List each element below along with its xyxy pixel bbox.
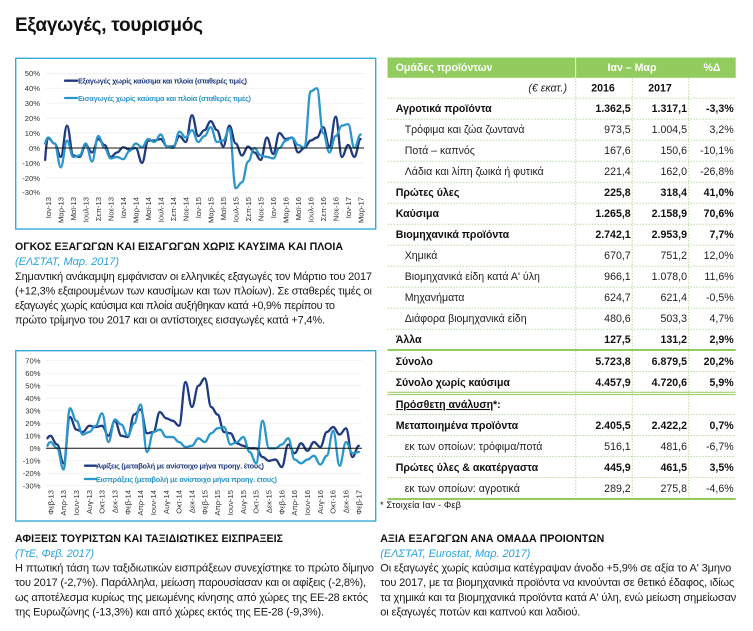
- table row: 4,7%: [710, 313, 734, 325]
- table row: -26,8%: [700, 166, 734, 178]
- panel: arrivals and receipts chart: [16, 351, 376, 521]
- table row: 6.879,5: [652, 356, 687, 368]
- table row: Ποτά – καπνός: [405, 145, 475, 157]
- y axis labels: -30%: [22, 188, 40, 197]
- y axis labels: 50%: [25, 382, 41, 390]
- table row: 670,7: [604, 250, 631, 262]
- table row: 2.742,1: [595, 229, 631, 241]
- legend: Εισαγωγές χωρίς καύσιμα και πλοία (σταθερές τιμές): [78, 94, 252, 103]
- table row: εκ των οποίων: τρόφιμα/ποτά: [405, 441, 542, 453]
- x axis labels: Αυγ-15: [239, 490, 248, 514]
- table row: 503,3: [660, 313, 687, 325]
- legend: Αφίξεις (μεταβολή με ανίστοιχο μήνα προηγ. έτους): [96, 462, 265, 470]
- table row: Διάφορα βιομηχανικά είδη: [405, 313, 527, 325]
- y axis labels: 10%: [25, 129, 40, 138]
- y axis labels: 30%: [25, 99, 40, 108]
- x axis labels: Απρ-14: [136, 490, 145, 516]
- table row: Πρώτες ύλες: [396, 187, 460, 199]
- y axis labels: -10%: [22, 159, 40, 168]
- text block: tourist arrivals and receipts: (ΤτΕ, Φεβ. 2017): [15, 548, 94, 560]
- table row: 1.317,1: [652, 103, 687, 115]
- x axis labels: Φεβ-17: [354, 490, 363, 515]
- x axis labels: Οκτ-13: [98, 490, 107, 514]
- series lines: [47, 378, 359, 470]
- table row: 0,7%: [710, 420, 734, 432]
- x axis labels: Σεπ-13: [94, 197, 103, 221]
- table row: [405, 483, 734, 495]
- table row: 5.723,8: [595, 356, 631, 368]
- table row: 2.953,9: [652, 229, 687, 241]
- table row: [396, 377, 734, 389]
- table row: 5,9%: [710, 377, 734, 389]
- table row: 624,7: [604, 292, 631, 304]
- x axis labels: [44, 197, 366, 223]
- x axis labels: Ιαν-17: [344, 197, 353, 218]
- text block: export value by product group: τα χημικά και τα βιομηχανικά προϊόντα κατά Α' ύλη, ενώ μείωση σημείωσαν: [380, 592, 737, 604]
- series lines: [45, 88, 361, 188]
- table row: -10,1%: [700, 145, 734, 157]
- text block: export value by product group: (ΕΛΣΤΑΤ, Eurostat, Μαρ. 2017): [380, 548, 531, 560]
- x axis labels: Ιουν-16: [303, 490, 312, 515]
- text block: tourist arrivals and receipts: της Ευρωζώνης (-13,3%) και από χώρες εκτός της ΕΕ-28 (-9,3%).: [15, 607, 324, 619]
- table row: εκ των οποίων: αγροτικά: [405, 483, 520, 495]
- table row: 1.004,5: [652, 124, 687, 136]
- table row: 289,2: [604, 483, 631, 495]
- x axis labels: Αυγ-13: [85, 490, 94, 514]
- text block: export value by product group: Οι εξαγωγές χωρίς καύσιμα κατέγραψαν άνοδο +5,9% σε αξία το Α' 3μηνο: [380, 563, 731, 575]
- table row: -3,3%: [706, 103, 734, 115]
- table row: [405, 250, 734, 262]
- x axis labels: Δεκ-15: [264, 490, 274, 513]
- text block: export value by product group: οι εξαγωγές ποτών και καπνού και λαδιού.: [380, 607, 580, 619]
- x axis labels: Ιουν-13: [72, 490, 81, 515]
- table row: 41,0%: [704, 187, 734, 199]
- x axis labels: Μαϊ-16: [294, 197, 303, 220]
- table row: 162,0: [660, 166, 687, 178]
- table row: [405, 124, 734, 136]
- x axis labels: Ιουν-14: [149, 490, 158, 515]
- x axis labels: Μαϊ-13: [69, 197, 78, 220]
- table header: (€ εκατ.): [528, 83, 567, 95]
- x axis labels: Σεπ-15: [244, 197, 253, 221]
- table row: 1.362,5: [595, 103, 631, 115]
- legend: [85, 462, 278, 484]
- text block: tourist arrivals and receipts: ως αποτέλεσμα κυρίως της μειωμένης κίνησης από χώρες της ΕΕ-28 εκτός: [15, 592, 368, 604]
- x axis labels: Οκτ-16: [329, 490, 338, 514]
- table row: 2.422,2: [652, 420, 687, 432]
- text block: tourist arrivals and receipts: ΑΦΙΞΕΙΣ ΤΟΥΡΙΣΤΩΝ ΚΑΙ ΤΑΞΙΔΙΩΤΙΚΕΣ ΕΙΣΠΡΑΞΕΙΣ: [15, 533, 284, 545]
- table row: Καύσιμα: [396, 208, 439, 220]
- x axis labels: Μαϊ-15: [219, 197, 228, 220]
- x axis labels: Μαρ-13: [56, 197, 66, 223]
- table row: Τρόφιμα και ζώα ζωντανά: [405, 124, 524, 136]
- table row: 973,5: [604, 124, 631, 136]
- x axis labels: Ιαν-16: [269, 197, 278, 218]
- table row: 516,1: [604, 441, 631, 453]
- table row: 12,0%: [704, 250, 734, 262]
- table row: Πρώτες ύλες & ακατέργαστα: [396, 462, 539, 474]
- table row: 480,6: [604, 313, 631, 325]
- table row: [396, 229, 734, 241]
- text block: export value by product group: [380, 533, 737, 619]
- footnote: * Στοιχεία Ιαν - Φεβ: [380, 500, 461, 510]
- table header: Ιαν – Μαρ: [607, 62, 657, 74]
- x axis labels: Δεκ-16: [342, 490, 350, 513]
- table header: Ομάδες προϊόντων: [396, 62, 493, 74]
- table row: [405, 145, 734, 157]
- table row: 2,9%: [710, 334, 734, 346]
- table row: [396, 462, 734, 474]
- legend: Εισπράξεις (μεταβολή με ανίστοιχο μήνα προηγ. έτους): [96, 475, 278, 484]
- x axis labels: Ιουλ-14: [156, 197, 166, 222]
- table row: 318,4: [660, 187, 687, 199]
- y axis labels: 60%: [25, 369, 41, 378]
- table row: [405, 166, 734, 178]
- x axis labels: Δεκ-14: [188, 490, 196, 513]
- text block: exports and imports volume: (ΕΛΣΤΑΤ, Μαρ. 2017): [15, 256, 119, 268]
- x axis labels: Δεκ-13: [110, 490, 120, 513]
- text block: exports and imports volume: πρώτο τρίμηνο του 2017 και οι αντίστοιχες εισαγωγές κατά +7,4%.: [15, 315, 325, 327]
- table row: 621,4: [660, 292, 687, 304]
- table row: 751,2: [660, 250, 687, 262]
- y axis labels: [23, 356, 41, 490]
- legend: Εξαγωγές χωρίς καύσιμα και πλοία (σταθερές τιμές): [78, 76, 248, 86]
- text block: export value by product group: του 2017, με τα βιομηχανικά προϊόντα να κινούνται σε θετικό έδαφος, ιδίως: [380, 577, 734, 589]
- table row: Βιομηχανικά προϊόντα: [396, 229, 510, 241]
- x axis labels: Σεπ-14: [169, 197, 178, 221]
- table row: Άλλα: [396, 334, 422, 346]
- text block: tourist arrivals and receipts: του 2017 (-2,7%). Παράλληλα, μείωση παρουσίασαν και οι αφίξεις (-2,8%),: [15, 577, 366, 589]
- text block: exports and imports volume: Σημαντική ανάκαμψη εμφάνισαν οι ελληνικές εξαγωγές τον Μάρτιο του 2017: [15, 271, 372, 283]
- table row: -4,6%: [706, 483, 734, 495]
- y axis labels: 0%: [30, 444, 41, 453]
- table header: 2016: [591, 83, 615, 95]
- x axis labels: Οκτ-15: [252, 490, 261, 514]
- table row: [396, 208, 734, 220]
- y axis labels: [22, 69, 40, 197]
- table row: 131,2: [660, 334, 687, 346]
- table row: Αγροτικά προϊόντα: [396, 103, 492, 115]
- table row: 461,5: [660, 462, 687, 474]
- table row: 11,6%: [704, 271, 734, 283]
- table row: 1.078,0: [652, 271, 687, 283]
- panel: product groups table: [388, 58, 736, 499]
- x axis labels: Φεβ-15: [200, 490, 209, 515]
- x axis labels: Ιαν-15: [194, 197, 203, 218]
- y axis labels: 30%: [25, 406, 41, 416]
- text block: export value by product group: ΑΞΙΑ ΕΞΑΓΩΓΩΝ ΑΝΑ ΟΜΑΔΑ ΠΡΟΙΟΝΤΩΝ: [380, 533, 604, 545]
- x axis labels: Νοε-16: [332, 197, 340, 221]
- table row: -6,7%: [706, 441, 734, 453]
- table row: Μηχανήματα: [405, 292, 464, 304]
- text block: exports and imports volume: εξαγωγές χωρίς καύσιμα και πλοία αυξήθηκαν κατά +0,9% περίπου το: [15, 300, 335, 312]
- x axis labels: Αυγ-14: [162, 490, 171, 514]
- x axis labels: Νοε-13: [106, 197, 116, 221]
- table row: [405, 271, 734, 283]
- y axis labels: 20%: [25, 419, 41, 428]
- x axis labels: Απρ-13: [59, 490, 68, 516]
- text block: exports and imports volume: (+12,3% εξαιρουμένων των καυσίμων και των πλοίων). Σε σταθερές τιμές οι: [15, 286, 373, 298]
- table row: 150,6: [660, 145, 687, 157]
- x axis labels: Μαρ-17: [356, 197, 366, 223]
- table header: 2017: [648, 83, 672, 95]
- table row: 4.457,9: [595, 377, 631, 389]
- text block: exports and imports volume: ΟΓΚΟΣ ΕΞΑΓΩΓΩΝ ΚΑΙ ΕΙΣΑΓΩΓΩΝ ΧΩΡΙΣ ΚΑΥΣΙΜΑ ΚΑΙ ΠΛΟΙΑ: [15, 241, 343, 253]
- y axis labels: -20%: [22, 174, 40, 183]
- table row: 2.405,5: [595, 420, 631, 432]
- x axis labels: Μαρ-16: [282, 197, 290, 223]
- table row: 966,1: [604, 271, 631, 283]
- table row: 275,8: [660, 483, 687, 495]
- table row: [396, 356, 734, 368]
- x axis labels: Νοε-15: [256, 197, 266, 221]
- table row: [396, 187, 734, 199]
- table row: [396, 420, 734, 432]
- table row: 225,8: [604, 187, 631, 199]
- x axis labels: Σεπ-16: [319, 197, 328, 221]
- table row: [405, 313, 734, 325]
- x axis labels: [46, 490, 363, 516]
- table row: Λάδια και λίπη ζωικά ή φυτικά: [405, 166, 544, 178]
- table row: Χημικά: [405, 250, 437, 262]
- y axis labels: 70%: [25, 356, 41, 366]
- table row: Σύνολο χωρίς καύσιμα: [396, 377, 510, 389]
- x axis labels: Ιαν-14: [119, 197, 128, 218]
- y axis labels: 0%: [29, 144, 40, 153]
- y axis labels: 10%: [25, 432, 41, 440]
- table row: Μεταποιημένα προϊόντα: [396, 420, 519, 432]
- x axis labels: Φεβ-16: [277, 490, 286, 515]
- y axis labels: -10%: [23, 456, 41, 466]
- table row: [396, 103, 734, 115]
- x axis labels: Ιαν-13: [44, 197, 53, 218]
- y axis labels: 20%: [25, 114, 40, 123]
- table row: 3,2%: [710, 124, 734, 136]
- table row: 2.158,9: [652, 208, 687, 220]
- x axis labels: Ιουλ-16: [306, 197, 316, 222]
- table row: 70,6%: [704, 208, 734, 220]
- x axis labels: Απρ-16: [290, 490, 299, 516]
- panel: exports and imports chart: [16, 58, 376, 229]
- text block: exports and imports volume: [15, 241, 373, 327]
- y axis labels: 40%: [25, 84, 40, 93]
- table row: 127,5: [604, 334, 631, 346]
- x axis labels: Ιουλ-15: [232, 197, 240, 222]
- table row: 481,6: [660, 441, 687, 453]
- table row: Βιομηχανικά είδη κατά Α' ύλη: [405, 271, 540, 283]
- table row: 7,7%: [710, 229, 734, 241]
- x axis labels: Φεβ-14: [123, 490, 132, 515]
- y axis labels: -20%: [23, 469, 41, 478]
- table row: 3,5%: [710, 462, 734, 474]
- y axis labels: -30%: [23, 482, 41, 490]
- text block: tourist arrivals and receipts: [15, 533, 374, 619]
- table row: 445,9: [604, 462, 631, 474]
- table row: 4.720,6: [652, 377, 687, 389]
- y axis labels: 50%: [25, 69, 40, 78]
- x axis labels: Νοε-14: [182, 197, 190, 221]
- table header: %Δ: [703, 62, 721, 74]
- title: Εξαγωγές, τουρισμός: [15, 15, 203, 36]
- table row: Σύνολο: [396, 356, 433, 368]
- x axis labels: Οκτ-14: [175, 490, 184, 514]
- y axis labels: 40%: [25, 394, 41, 403]
- table row: [396, 334, 734, 346]
- x axis labels: Μαϊ-14: [144, 197, 153, 220]
- table header: [388, 58, 736, 95]
- table row: 167,6: [604, 145, 631, 157]
- x axis labels: Απρ-15: [213, 490, 222, 516]
- x axis labels: Μαρ-15: [206, 197, 216, 223]
- table row: Πρόσθετη ανάλυση*:: [396, 399, 501, 411]
- table row: [405, 292, 734, 304]
- legend: [65, 76, 252, 103]
- table row: 1.265,8: [595, 208, 631, 220]
- table row: 221,4: [604, 166, 631, 178]
- table row: -0,5%: [706, 292, 734, 304]
- text block: tourist arrivals and receipts: Η πτωτική τάση των ταξιδιωτικών εισπράξεων συνεχίστηκε το πρώτο δίμηνο: [15, 563, 374, 575]
- x axis labels: Ιουλ-13: [82, 197, 90, 222]
- x axis labels: Ιουν-15: [226, 490, 235, 515]
- table row: 20,2%: [704, 356, 734, 368]
- x axis labels: Αυγ-16: [316, 490, 325, 514]
- x axis labels: Φεβ-13: [46, 490, 55, 515]
- x axis labels: Μαρ-14: [132, 197, 140, 223]
- table row: [405, 441, 734, 453]
